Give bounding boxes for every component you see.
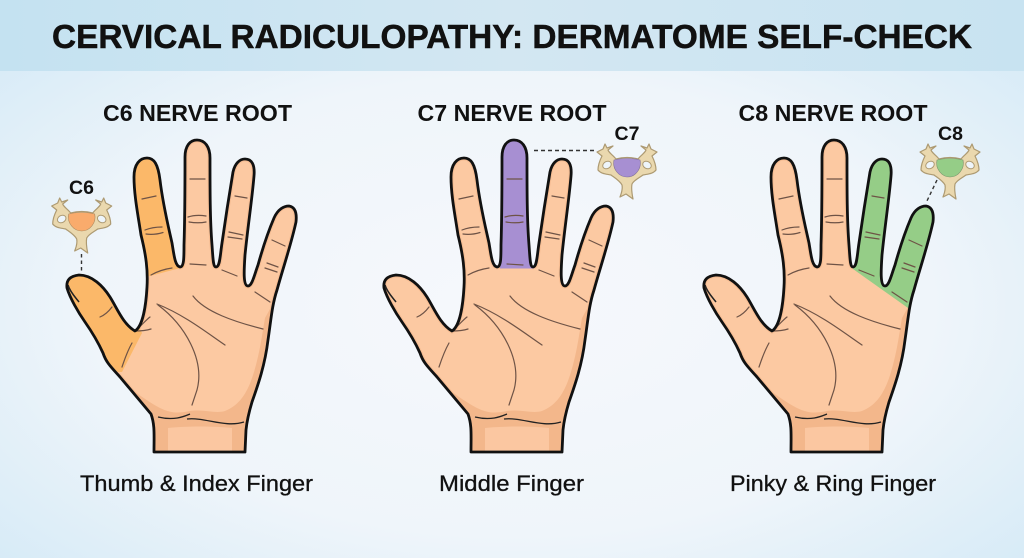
hand: C8 ring and pinky highlighted [704,140,947,460]
caption: C7: Middle Finger [439,471,584,496]
vertebra label: C7: C7 [615,123,639,145]
panel: C7 [384,100,657,496]
caption: C6: Thumb & Index Finger [80,471,313,496]
title banner: CERVICAL RADICULOPATHY: DERMATOME SELF-CHECK [52,18,972,55]
heading: C6: C6 NERVE ROOT [103,100,292,126]
vertebra: C8 [920,144,980,199]
title banner [0,0,1024,71]
panel: C8 [704,100,980,496]
heading: C8: C8 NERVE ROOT [738,100,928,126]
caption: C8: Pinky & Ring Finger [730,471,936,496]
heading: C7: C7 NERVE ROOT [418,100,606,126]
vertebra: C7 [597,144,657,199]
hand: C7 middle finger highlighted [384,130,622,460]
hand: C6 thumb and index highlighted [60,140,305,460]
connector: C6 [80,254,82,273]
vertebra label: C6: C6 [69,177,94,199]
connector: C7 [534,150,594,152]
vertebra: C6 [52,198,112,253]
panel: C6 [52,100,313,496]
vertebra label: C8: C8 [938,123,963,145]
connector: C8 [926,180,937,203]
